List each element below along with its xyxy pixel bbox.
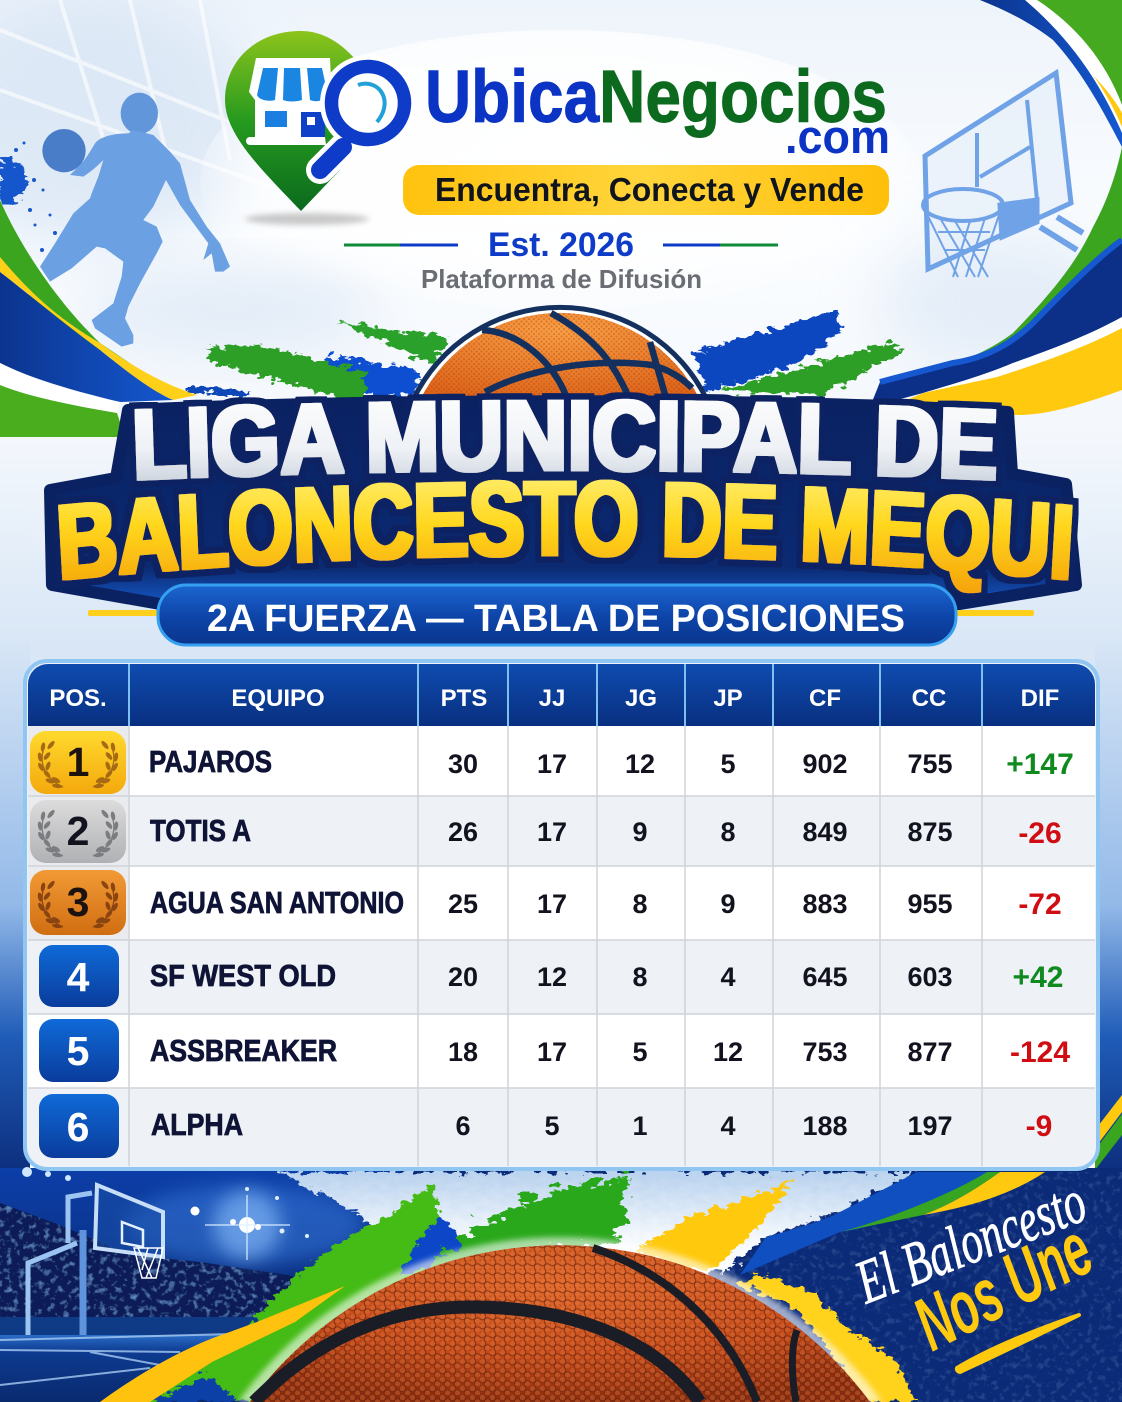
- player: head: [121, 93, 158, 134]
- row 5: Assbreaker: 5: [632, 1037, 648, 1067]
- table header: JP: [713, 685, 743, 712]
- yellow brush right: [737, 1275, 916, 1402]
- table header: CF: [809, 685, 841, 712]
- row 6: Alpha: [39, 1094, 1052, 1158]
- green brush left: [143, 1183, 450, 1402]
- right swoosh: [870, 0, 1122, 415]
- row 6: Alpha: ALPHA: [151, 1107, 243, 1142]
- row 2: Totis A: 2: [67, 808, 89, 854]
- table header: DIF: [1021, 685, 1059, 712]
- table header: CC: [912, 685, 946, 712]
- row 4: SF West Old: 603: [907, 962, 953, 992]
- table frame: [25, 661, 1098, 1169]
- row 6: Alpha: 6: [67, 1104, 89, 1150]
- bottom-left arena: [0, 1167, 400, 1402]
- slogan underline: [957, 1315, 1079, 1372]
- logo: domain: .com: [785, 110, 890, 163]
- logo: store icon: [246, 58, 332, 145]
- bottom-right mottled texture: [720, 1172, 1122, 1402]
- table header: PTS: [441, 685, 487, 712]
- title plate: [50, 401, 1076, 604]
- row 6: Alpha: 188: [802, 1111, 848, 1141]
- row 3: Agua San Antonio: 955: [907, 889, 953, 919]
- bottom background: [0, 1167, 1122, 1402]
- row 2: Totis A: 26: [448, 817, 478, 847]
- row 3: Agua San Antonio: -72: [1018, 888, 1062, 921]
- row 1: Pajaros: 1: [67, 739, 89, 785]
- background: side strips beside table: [0, 640, 1122, 1170]
- row 6: Alpha: 197: [907, 1111, 953, 1141]
- row 4: SF West Old: +42: [1013, 961, 1063, 994]
- row 4: SF West Old: 4: [720, 962, 736, 992]
- white paint splash: [279, 1172, 916, 1280]
- logo: wordmark: UbicaNegocios: [425, 55, 887, 138]
- row 5: Assbreaker: 753: [802, 1037, 848, 1067]
- table header: [28, 664, 1095, 726]
- row 4: SF West Old: 20: [448, 962, 478, 992]
- row 2: Totis A: -26: [1018, 817, 1062, 850]
- row 6: Alpha: -9: [1026, 1110, 1052, 1143]
- green ribbon: [840, 1172, 1000, 1232]
- row 4: SF West Old: 8: [632, 962, 648, 992]
- yellow ribbon: [923, 1172, 1045, 1215]
- standings table: [25, 661, 1098, 1169]
- row 5: Assbreaker: [39, 1019, 1070, 1082]
- established year: Est. 2026: [488, 226, 634, 264]
- row 5: Assbreaker: 12: [713, 1037, 743, 1067]
- row 1: Pajaros: 30: [448, 749, 478, 779]
- row 3: Agua San Antonio: 9: [720, 889, 736, 919]
- top basketball: [413, 307, 707, 400]
- row 1: Pajaros: 755: [907, 749, 953, 779]
- row 6: Alpha: 4: [720, 1111, 736, 1141]
- row 3: Agua San Antonio: 883: [802, 889, 848, 919]
- row 4: SF West Old: [39, 945, 1063, 1007]
- logo: [225, 31, 890, 225]
- row 5: Assbreaker: 18: [448, 1037, 478, 1067]
- table header: POS.: [49, 685, 107, 712]
- row 2: Totis A: 8: [720, 817, 736, 847]
- row 5: Assbreaker: 877: [907, 1037, 953, 1067]
- table header: JJ: [539, 685, 565, 712]
- logo: pin shadow: [245, 213, 369, 225]
- row 1: Pajaros: PAJAROS: [149, 744, 272, 779]
- row 4: SF West Old: 12: [537, 962, 567, 992]
- row 5: Assbreaker: -124: [1010, 1036, 1070, 1069]
- bright blue arc upper right: [740, 1172, 990, 1275]
- row 3: Agua San Antonio: 17: [537, 889, 567, 919]
- table header: JG: [625, 685, 657, 712]
- row 6: Alpha: 1: [632, 1111, 648, 1141]
- row 1: Pajaros: 17: [537, 749, 567, 779]
- row 5: Assbreaker: 5: [67, 1028, 89, 1074]
- logo: map pin: [225, 31, 360, 211]
- background: upper stadium: [0, 0, 1122, 1100]
- row 4: SF West Old: SF WEST OLD: [150, 958, 336, 993]
- yellow brush top: [637, 1177, 795, 1270]
- blue patch in green: [150, 1375, 240, 1402]
- row 1: Pajaros: +147: [1006, 748, 1074, 781]
- brush strokes behind top ball: [190, 311, 902, 405]
- large basketball: [238, 1237, 882, 1402]
- row 3: Agua San Antonio: 3: [67, 879, 89, 925]
- row 2: Totis A: 17: [537, 817, 567, 847]
- bottom-left hoop: [28, 1185, 163, 1335]
- row 6: Alpha: 5: [544, 1111, 560, 1141]
- row 5: Assbreaker: ASSBREAKER: [150, 1033, 337, 1068]
- left swoosh: [0, 200, 197, 437]
- row backgrounds: [28, 726, 1095, 1166]
- subtitle banner: 2A FUERZA — TABLA DE POSICIONES: [207, 598, 905, 640]
- row 1: Pajaros: [30, 731, 1074, 794]
- row 3: Agua San Antonio: 25: [448, 889, 478, 919]
- title line 1: LIGA MUNICIPAL DE: [129, 392, 1002, 486]
- splatter: left blue: [0, 142, 57, 252]
- subtitle: Plataforma de Difusión: [421, 264, 702, 294]
- row 1: Pajaros: 902: [802, 749, 848, 779]
- row 3: Agua San Antonio: 8: [632, 889, 648, 919]
- row 2: Totis A: 875: [907, 817, 953, 847]
- row 2: Totis A: TOTIS A: [150, 813, 251, 848]
- row 1: Pajaros: 12: [625, 749, 655, 779]
- logo: magnifier: [320, 59, 412, 170]
- player: body: [40, 130, 230, 347]
- row 2: Totis A: [30, 800, 1062, 863]
- table header: EQUIPO: [231, 685, 325, 712]
- row 2: Totis A: 9: [632, 817, 648, 847]
- player: ball: [42, 129, 86, 172]
- slogan pill: [403, 165, 889, 215]
- yellow band left: [100, 1286, 345, 1402]
- row 5: Assbreaker: 17: [537, 1037, 567, 1067]
- hoop: upper right: [923, 73, 1083, 277]
- subtitle banner: [88, 585, 1034, 645]
- row 3: Agua San Antonio: AGUA SAN ANTONIO: [150, 885, 404, 920]
- row 4: SF West Old: 645: [802, 962, 848, 992]
- row 2: Totis A: 849: [802, 817, 848, 847]
- row 4: SF West Old: 4: [67, 954, 90, 1000]
- blue brush: [387, 1215, 470, 1295]
- title line 2: BALONCESTO DE MEQUI: [56, 474, 1079, 598]
- green brush centre: [430, 1173, 630, 1290]
- row 1: Pajaros: 5: [720, 749, 736, 779]
- player silhouette: [40, 93, 230, 347]
- row 6: Alpha: 6: [455, 1111, 471, 1141]
- slogan pill: Encuentra, Conecta y Vende: [435, 171, 864, 208]
- row 3: Agua San Antonio: [30, 870, 1062, 935]
